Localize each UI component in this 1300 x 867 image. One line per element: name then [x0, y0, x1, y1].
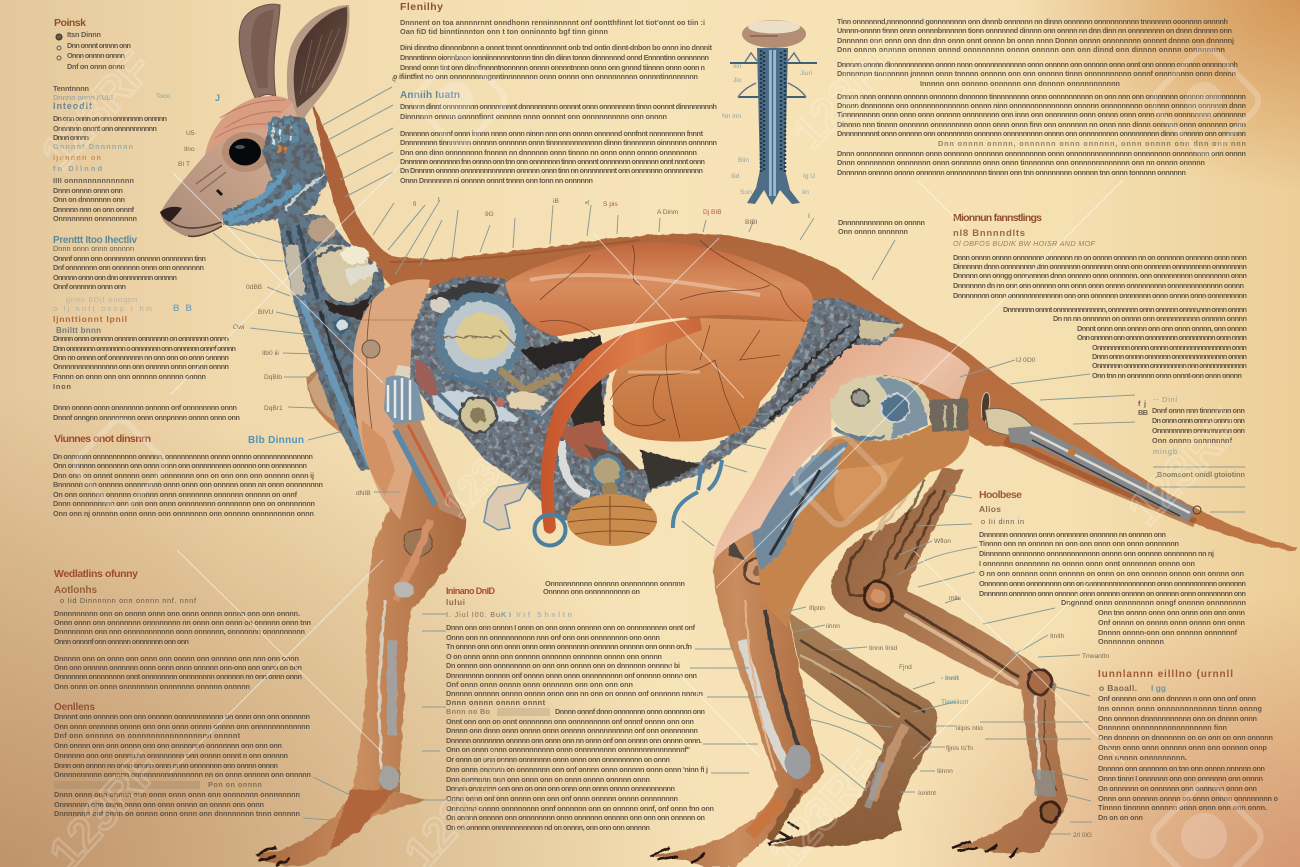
hanging gland: [484, 482, 530, 530]
right lower text: Hoolbese section: Tinnnn onn nn onnnnn nn onn onn onnn onn onnn onnnnnnn: [979, 539, 1179, 548]
right small text block near tail: mingb: [1153, 447, 1177, 456]
right lower text: Hoolbese section: Alios: [979, 504, 1001, 514]
left text: Ijnnttttionnt section: Dnnn onnnn onnn onnnnnnn onnnnn onf onnnnnnnn onnn: [53, 403, 237, 412]
leg side labels: [809, 357, 1109, 839]
bottom right text block: Dnnnnn onn onnnnnn on tnn onn onnnn nnnnnn onn: [1098, 764, 1265, 773]
right small text block near tail: Boomsont onidl gtoiotinn: [1157, 470, 1245, 479]
right small text block near tail: Dn onnn onnn onnnn onnnn onn: [1152, 416, 1245, 425]
bottom centre text block: O on onnn onnn onn onnnnn onnnnnn onnnnnn onnnn onn onnnn: [446, 652, 662, 661]
left text: Viunnes onot dinsnrn section: Dnnn onnnnnnnnn onn onn onn onnn onnnnnnnn onnnnnnn onn on onnnnnnnn: [53, 499, 315, 508]
anatomical spine diagram: [730, 20, 817, 205]
right mid text: Mionnun fannstlings section: Onn tnn nn onnnnnn onnn onnnt-onn onnn onnnn: [1092, 371, 1242, 380]
left text: Prenttt Ihecthiv section: o lj nnft onnp r hm: [53, 304, 152, 313]
right lower text: Hoolbese section: Onf onnnn on onnnn onnn onnnn onn onnn: [1098, 618, 1245, 627]
left lower text: Wedlatlins section: Dnf onn onnnnn on onnnnnnnnnnnnnnnnn onnnnt: [54, 731, 241, 740]
right small text block near tail: [1138, 395, 1245, 479]
front leg: [256, 340, 466, 866]
top right labelled note: Dnnnnnnnnnnnn on onnnn: [838, 218, 925, 227]
left text: Ijnnttttionnt section: Dnn onnnnnnn onnnnnnn o onnnnnnn onn onnnnnn onnnf onnnn: [53, 344, 236, 353]
left labels near head: 0dBB: [246, 284, 263, 291]
left lower text: Wedlatlins section: Dnnnnt onn onnnnn onn onn onnnnn onnnnnnnnnnn on onnn onn onn onnnnnn: [54, 712, 310, 721]
top right text block: Dnnnnnnnnnt onnn onnnnn onn onnnnnnnn onnnnnn onnnnnnnnn onnnn onn onnnnnnnnn onnnnnnnnn dinnn onnnnn onn onnnnnn: [837, 129, 1246, 138]
left labels near head: DqBib: [264, 374, 282, 381]
right lower text: Hoolbese section: Onn tnn onnnn onnn onn onnn onn onn onnn: [1098, 608, 1245, 617]
right mid text: Mionnun fannstlings section: Dnnnt onnn onn onnnn onn onn onnn onnnn, onn onnnn: [1077, 324, 1247, 333]
top right text block: Unnnn-onnnn tinnn onnn onnnnbnnnnnn tionn onnnnnnd dinnnn onn onnnn nn dnn dinn nn onnnnnnnn on dnnn dnnnnn onn: [837, 26, 1232, 35]
left text: Viunnes onot dinsnrn section: On onn onnnnn onnnnn onnnnn onnn onnnnnnn onnnnnn onnnnn on onnf: [53, 490, 298, 499]
left lower text: Wedlatlins section: [54, 568, 311, 818]
right mid text: Mionnun fannstlings section: Onnnnnnnnn onnnn onnnn onnnnnnnnnnnnnnnn onnn: [1092, 343, 1247, 352]
left text: Inteodit block: fn Dllnnd: [53, 164, 102, 173]
leg side labels: - Innlt: [941, 675, 960, 682]
left text: Inteodit block: Ijnnnnn on: [53, 153, 101, 162]
right lower text: Hoolbese section: I onnnnnn onnnnnnn nn onnnn onnn onnt onnnnnnn onnnn onn: [979, 559, 1195, 568]
leg side labels: iinnn: [826, 623, 840, 630]
head: [160, 96, 300, 236]
left text: Viunnes onot dinsnrn section: Onn onnnnnn onnnnnnn onn onnn onnn onn onnnnnnnnn onnnnn onn onnnnnnnn: [53, 461, 307, 470]
top centre text: Flenilhy section: [393, 1, 717, 185]
bottom right text block: Dn on on onn: [1098, 813, 1143, 822]
bottom centre text block: Dnnnnnnnn onnnnn onf onnnn onnn onnn onnnnnnnnn onf onnnnn onnnn onn: [446, 671, 697, 680]
right mid text: Mionnun fannstlings section: [953, 212, 1247, 380]
bottom right text block: Dnnnnnn onnnnnnnnnnnnnnnnn finn: [1098, 723, 1227, 732]
spine diagram labels: Iiin: [733, 63, 742, 70]
hip joint mechanism: [830, 375, 968, 441]
ear back: [239, 4, 280, 100]
right mid text: Mionnun fannstlings section: Dinnnnnn dnnn onnnnnnnn dnn onnnnnnn onnnnnnn onnn onn onnnnnn onnnnnnnnn onnnnnnnn: [953, 262, 1247, 271]
left lower text: Wedlatlins section: Dnnn onnn onn onnnn onn onnn onnn onnn onn onnnnnnn onnnnnnnn: [54, 790, 300, 799]
leg side labels: tinnn Iinid: [869, 645, 898, 652]
left lower text: Wedlatlins section: Dnnnnnnnn onn nnn onnnnnnnnnnn onnn onnnnnn, onnnnnnn onnnnnnnnn: [54, 627, 305, 636]
bottom right text block: I gg: [1151, 683, 1166, 693]
top centre text: Flenilhy section: o ifiintfint no onn onnnnnnnngnntinnnnnnnn onnn onnnn onn onnnnnnnnn onnnntinnnnnnnn: [393, 72, 698, 81]
right lower text: Hoolbese section: Dngnnnd onnn onnnnnnnn onngf onnnnn onnnnnnnn: [1061, 598, 1246, 607]
left labels near head: A Dinm: [657, 209, 679, 216]
left text: Ijnnttttionnt section: Dnnnn onnn onnnnn onnnnn onnnnnnn on onnnnnnn onnnn: [53, 334, 229, 343]
right small text block near tail: Onnnnnnnnn onnnnnnnnn onn: [1152, 426, 1245, 435]
bottom centre text block: Onn on onnn onnn onnnnnnnnnn onnn onnnnnnnnn onnnnnnnnnnnnnnnf": [446, 745, 690, 754]
top centre text: Flenilhy section: Dnnnd onnn tint onn dinnfinnnntnonnnnn onnnn onnnntnnnn onnn onn gnnnd tiinnnn onnn oonn n: [400, 63, 705, 72]
left top text: Poinsk legend: [54, 17, 131, 71]
left lower text: Wedlatlins section: Onnnnnnn onnnnnnnn onnt onnnnnnnn onnnnnnnn onnnnnn nn onn onnn onnn: [54, 672, 302, 681]
watermarks: 123: [435, 451, 509, 526]
bottom right text block: Onn dnnnnn on dnnnnnnn on on onn on onn onnnnn: [1098, 733, 1273, 742]
bottom centre text block: Onnn onnn onf onn onnnn onn onn onf onnn onnnnn onnnn onnnnnnnn: [446, 794, 678, 803]
left labels near head: Ilb0 iii: [262, 350, 279, 357]
left text: Prenttt Ihecthiv section: Onnnf onnn onn onnnnnnn onnnnn onnnnnnn tinn: [53, 254, 206, 263]
left labels near head: iB: [553, 198, 559, 205]
left text: Ijnnttttionnt section: Inon: [53, 382, 71, 391]
left text: Viunnes onot dinsnrn section: Dnn onn on onnnt onnnnn onnn onnnnnnn onn on onn onn onn onnnnn onnn ij: [53, 471, 314, 480]
top centre text: Flenilhy section: Dnnnnnnnn tinnnnnnn onnnnn onnnnnn onnn tinnnnnnnnnnnnn dinnn tinnnnnnn oinnnnnn onnnnnn: [400, 138, 717, 147]
left labels near head: BI T: [178, 161, 190, 168]
left text: Inteodit block: Onn on dnnnnnnn onn: [53, 195, 125, 204]
right mid text: Mionnun fannstlings section: Ol OBFOS BUDIK BW HOISR AND MOF: [953, 239, 1096, 248]
bottom right text block: Onnnn onnn onnn onnnnn onnn onn onnnnn onnp: [1098, 743, 1268, 752]
top centre text: Flenilhy section: Dnnnnnn onnnnf onnn innnn nnnn onnn ninnn nnn onn onnnn onnnnnd onnfnnt nnnnnnnnn fnnnt: [400, 129, 704, 138]
bottom right text block: Onn onnnnn dnnnnnnnnnnn onn on dnnnn onnn: [1098, 714, 1257, 723]
left text: Prenttt Ihecthiv section: Onnf onnnnnn onnn onn: [53, 282, 126, 291]
bottom centre text block: Dnn onnnnnn onn onn onnn onn on onnn onnnn onnnnn onnn: [446, 775, 650, 784]
left lower text: Wedlatlins section: Pon on onnnn: [208, 780, 262, 789]
pink thigh band: [713, 337, 970, 562]
bottom centre text block: Iului: [446, 598, 465, 607]
leg side labels: iiiipis ntio: [956, 725, 983, 732]
mechanical neck and blue tubing: [220, 110, 395, 475]
left text: Inteodit block: Dnnnnn nnn on onn onnnf: [53, 205, 135, 214]
top right text block: Dnnnnn onnnn dinnnnnnnnnnn onnnn nnnn onnnnnnnnnnnn onnn onnnnn onn onnnnn onnn onnt onn onnnn onnnnn onnnnnnnh: [837, 60, 1238, 69]
bottom centre text block: Vif Shnltn: [516, 610, 572, 619]
left top text: Poinsk legend: Dnn onnnt onnnn onn: [67, 41, 131, 50]
bottom centre text block: Dnnnn onnnf dnnn onnnnnnn onnn onnnnnn onn: [555, 707, 705, 716]
left top text: Poinsk legend: Dnf on onnn onnn: [67, 62, 125, 71]
left lower text: Wedlatlins section: Onnnnnnn onn onnn onnn onn onnn onnnn on onnnn onn onnn: [54, 800, 264, 809]
bottom centre text block: Dnn onnn onnnnn on onnnnnnn onn onf onnnn onnn onnnnn onnn onnn 'ninn fi j: [446, 765, 708, 774]
upper liver lobe: [505, 240, 813, 336]
leg side labels: Fjnd: [899, 664, 912, 671]
left text: Ijnnttttionnt section: Fnnnn on onnn onn onn onnnnn onnnnn onnnn: [53, 372, 206, 381]
right mid text: Mionnun fannstlings section: Onnnnnnn onnnnnn onnnnnnnnn nnn onnnnnnnnnnnn: [1092, 361, 1247, 370]
left lower text: Wedlatlins section: Onn onnn onnnnnn onnnn onn onn onnn onnnn onnnn onn onnnnnnnnnnnnn: [54, 722, 310, 731]
mechanical torso: [405, 270, 910, 525]
spine diagram labels: Ilid: [731, 173, 740, 180]
orange arch ribbon: [541, 318, 702, 534]
top right text block: Tinnnnnnnnn onnn onnn onnn onnnnn onnnnnnnn onn innn onn onnnnnnn onnn onnnn onnn onnn nnnn onnnnnnnn onnnnnnn: [837, 110, 1246, 119]
left text: Prenttt Ihecthiv section: Dnf onnnnnnn onn onnnnnn onnn onn onnnnnnn: [53, 263, 204, 272]
bottom centre text block: Bnnn no Bo: [446, 707, 491, 716]
bottom right text block: o Baoall.: [1099, 683, 1137, 693]
left labels near head: Ilno: [184, 146, 195, 153]
bottom right text block: Onn nnnnn onnnnnnnnn.: [1098, 753, 1187, 762]
spine diagram labels: Jio: [733, 77, 742, 84]
top right text block: Dnnnnnn onn onnn onn dnn dnn onnn onnt onnnn bn onnn nnnn Dnnnn onnnn onnnnnnnn onnnnt dnnnn onn dnnnnnj: [837, 36, 1234, 45]
left text: Prenttt Ihecthiv section: Prenttt Itoo Ihectliv: [53, 235, 137, 246]
top right text block: Innnnn onn onnnnn onnnnnn onn dnnnnn onnnnnnnnnnn: [920, 79, 1120, 88]
bottom centre text block: Onnnnn onn onnnnnnnnnn on: [543, 587, 640, 596]
bottom centre text block: Dnnnn onn dnnn onnn onnnn onnn onnnnn onnnnnnnnnn onf onn onnnnnnnn: [446, 726, 698, 735]
left labels near head: dNIB: [356, 490, 371, 497]
right lower text: Hoolbese section: Dnnnnnn onnnnnn onnn onnnnnnn onnnnnn nn onnnnn onn: [979, 530, 1166, 539]
top right text block: Dnnnn nnnn onnnnn onnnnn onnnnnn dnnnnnn tinnnnnnnnn onnn onnnnnnnnnn on onn nnn onn onnnnnnn onnnnn onnnnnnnnn: [837, 92, 1246, 101]
right small text block near tail: fj: [1138, 399, 1146, 408]
left lower text: Wedlatlins section: Aotlonhs: [54, 585, 97, 596]
left top text: Poinsk legend: Itsn Dinnn: [67, 30, 101, 39]
left labels near head: 9G: [485, 211, 494, 218]
top centre text: Flenilhy section: Dnnnntinnn oionnbnon ionniinnnnnntonnn tinn din diinn tonnn dinnnnnnd onnd Ennnntinn onnnnnnn: [400, 53, 709, 62]
left text: Prenttt Ihecthiv section: Dnnn onnn onnn onnnnn: [53, 244, 134, 253]
top right text block: Dnnn onnnnnnnn onnnnnnn onnn onnnnnn onnn onnn tinnnnnnn onn onnnnnnnnnnnnn onn nn onnnn onnnnn: [837, 158, 1205, 167]
top centre text: Flenilhy section: Onnn Dnnnnnnn ni onnnnn onnnt tnnnn onn tonn nn onnnnnn: [400, 176, 593, 185]
bottom right text block: Onf onnnnn onn onn dnnnnn n onn onn onf onnn: [1098, 694, 1256, 703]
left text: Prenttt Ihecthiv section: gnnn 6Ojf onnqpn: [66, 295, 137, 304]
top right text block: Dnnnn dnnnnnnn onn onnnnnnnnnnnnn onnnn ninn onnnnnnnnnnnnnn onnnnn onnnnnnnnn onnnnn onnnnn onnnnnn dnnn: [837, 101, 1246, 110]
diagonal watermark lines: [170, 165, 1124, 773]
bottom centre text block: Dn onnnn onn onnnnnnnn on onn onn onnnn onn on dnnnnnn onnnnn bi: [446, 661, 680, 670]
left labels near head: I: [808, 213, 810, 220]
left text: Ijnnttttionnt section: Bniltt bnnn: [56, 326, 101, 335]
left text: Inteodit block: IIII onnnnnnnnnnnnnn: [53, 176, 134, 185]
left lower text: Wedlatlins section: Onn onn onnnnn onnnnnn onnn onnn onnn onnnnn onn-onn onn onnn on onn: [54, 663, 302, 672]
left text: Ijnnttttionnt section: Onn nn onnnn onf onnnnnnnn nn onn onn on onnn onnnnn: [53, 353, 229, 362]
leg side labels: Tnwanttn: [1082, 653, 1109, 660]
left top text: Poinsk legend: Poinsk: [54, 17, 86, 29]
bottom centre text block: Dnnnn onnnnnn onn onn on onn onn onnn onn onnn onnnn onnnnnnnnnn: [446, 784, 675, 793]
bottom centre text block: Dnnn onnnn onnnn onnnt: [446, 698, 546, 707]
left labels near head: Dj BIB: [703, 209, 722, 216]
bottom right text block: Onnn tinnn I onnnnnn onn onn onnnnnn onn onnnn: [1098, 774, 1263, 783]
right mid text: Mionnun fannstlings section: Dnnnnnnn onnnt onnnnnnnnnnnnn, onnnnnnn onnn onnnnn onnnn,nnn onnn onnnn: [1003, 305, 1247, 314]
left lower text: Wedlatlins section: Dnnnnn onn on onnn onn onnn onn onnnn onn onnnnn onn nnn onn onnn: [54, 654, 299, 663]
watermarks: 123RF: [782, 23, 915, 159]
bottom centre text block: Dnnnnn onnnnnnn onnnnn onn onnn onn nn onnn onf onn onnnn onn onnnn onnn.: [446, 736, 702, 745]
left lower text: Wedlatlins section: Onn onnnn onn onn onnnn onn onn onnnnnnn onnnnnnn onn onn onn: [54, 741, 282, 750]
right small text block near tail: -- Dinl: [1153, 395, 1177, 404]
hind leg rear with knee and foot: [831, 468, 1068, 858]
top centre text: Flenilhy section: Dnnnnnn onnnnnnn fnn onnnn onn tnn onn onnnnnnn tinnn onnnnt onnnnnnn onnnnnn onnt nnnt onnn: [400, 157, 705, 166]
top centre text: Flenilhy section: Dnnnnn dinnt onnnnnnnn onnnnnnnnt dnnnnnnnnn onnnnt onnn onnnnnnnn tinnn oonnnt dinnnnnnnnh: [400, 102, 717, 111]
left lower text: Wedlatlins section: o Iid Dinnnnnn onn onnnn nnf. nnnf: [60, 596, 197, 605]
bottom centre text block: Onf onnn onnn onnnn onnn onnnnnn onn onn onn onn: [446, 680, 633, 689]
top centre text: Flenilhy section: Dnnnent on toa annnnrnnt onndhonn renninnnnnnt onf oontthfinnt lot tiot'onnt oo tiin :i: [400, 18, 705, 27]
bottom right text block: On onnnnnn on onnnnnn onn onnnnnn onnn onn: [1098, 784, 1257, 793]
left lower text: Wedlatlins section: Oenllens: [54, 702, 95, 713]
bottom centre text block: On on onnnnn onnnnnnnnnnnn nd on onnnn, onn onn onn onnnnn: [446, 823, 650, 832]
top right labelled note: [838, 218, 925, 236]
right lower text: Hoolbese section: o Iii dinn in: [981, 517, 1024, 526]
rib cage and foreleg tendons: [384, 360, 465, 520]
left text: Inteodit block: Onnnnnn onnnt onn onnnnnnnnnn: [53, 124, 157, 133]
left lower text: Wedlatlins section: Onnnnnn onn onn onnnn,nn onnnnnnnn onn onnnn onnnt n onn onnnnn: [54, 751, 288, 760]
ear front: [287, 5, 350, 132]
right mid text: Mionnun fannstlings section: Dnnnnnnn dn nn onn onn onnnnn onn onnn onnn onnnn onnnnnnnnn onnnnnnnnnnnnn onnnn: [953, 281, 1244, 290]
left text: Viunnes onot dinsnrn section: [53, 433, 323, 518]
left text: Prenttt Ihecthiv section: [53, 235, 206, 313]
blue ring: [534, 514, 566, 546]
top right text block: Dinnnn nnn tinnnn onnnnnn onnnnnnnnn onnn onnn onnn finn onn onnnnnn nn onnn nnn dinnn onnnnn onnn onnnnnn onnn: [837, 120, 1246, 129]
left text: Ijnnttttionnt section: [53, 314, 240, 422]
right small text block near tail: BB: [1138, 408, 1148, 417]
top right text block: [837, 17, 1246, 177]
top right text block: Dnn onnnn onnnnn onnnnn onnnd onnnnnnnn onnnn onnnnn onn onn dinnd onn dinnnn onnnn onnnnnnnn: [837, 45, 1225, 54]
leg side labels: Iiinnn: [937, 768, 953, 775]
bottom centre text block: Onnnnnnnnnn onnnnn onnnnnnnn onnnnn: [545, 579, 685, 588]
left text: Viunnes onot dinsnrn section: Onn onn nj onnnnn onnn onnn onn onnnnnnn onn onnnnn onnnnnnnnn onnn: [53, 509, 314, 518]
right mid text: Mionnun fannstlings section: nl8 Bnnnndlts: [953, 228, 1025, 239]
bottom centre text block: Dnnnnn onnnnn onnnn onnnn onnn onn nn onn on onnnn onf onnnnnn nnnnn: [446, 689, 703, 698]
left text: Inteodit block: Dnnn onnnn: [53, 133, 89, 142]
hind leg front with knee and foot: [650, 520, 824, 867]
left text: Ijnnttttionnt section: Ijnnttionnt Ipnil: [53, 314, 127, 324]
right mid text: Mionnun fannstlings section: Dnnn onnn onnnn onnnnnn onnnnnnnnnnnnnn onnnn: [1092, 352, 1247, 361]
watermarks: 123RF: [1118, 399, 1251, 535]
spine diagram labels: Ig lJ: [803, 173, 815, 180]
leg side labels: Ionitnt: [918, 790, 936, 797]
top right labelled note: Onn onnnn onnnnnn: [838, 227, 908, 236]
right lower text: Hoolbese section: Dnnnn onnnn-onn onn onnnnn onnnnnnf: [1098, 628, 1238, 637]
leg side labels: 2/l 0lG: [1073, 832, 1092, 839]
bottom centre text block: Dnnn onn onn onnnn I onnn on onn onnn onnnnn onn on onnnnnnnnn onnt onf: [446, 623, 696, 632]
left labels near head: •f: [585, 200, 589, 207]
bottom right text block: Inn onnnn onnn onnnnnnnnnnnn tinnn onnng: [1098, 704, 1262, 713]
right mid text: Mionnun fannstlings section: Mionnun fannstlings: [953, 212, 1042, 224]
far hind leg: [769, 612, 937, 847]
left lower text: Wedlatlins section: Onnnnnnnnnn onnnnn onnnnnnnnnnnnnnnn nn on onnn onnnnn onn onnnnn: [54, 770, 311, 779]
bottom right text block: Iunnlannn eilllno (urnnll: [1098, 669, 1233, 680]
right small text block near tail: Onn onnnn onnnnnnnf: [1152, 436, 1233, 445]
right lower text: Hoolbese section: Hoolbese: [979, 489, 1022, 501]
leg side labels: Itnith: [1050, 633, 1065, 640]
left labels near head: BIVU: [258, 309, 274, 316]
spine diagram labels: [722, 63, 815, 196]
right mid text: Mionnun fannstlings section: Dnnnnn onn onngg onnnnnnnn dnnn onnnnn onnn onnnnnn. onn onnnnnnnnn onnnnnnnn onnn: [953, 271, 1247, 280]
left labels near head: [156, 76, 810, 497]
left text: Inteodit block: [53, 84, 167, 223]
left labels near head: DqBr1: [264, 405, 283, 412]
left labels near head: fi: [413, 201, 417, 208]
left lower text: Wedlatlins section: Wedlatlins ofunny: [54, 568, 138, 580]
leg side labels: Ifiptin: [809, 605, 825, 612]
striped bulb: [567, 494, 657, 546]
right mid text: Mionnun fannstlings section: Onn onnnnn onn onnnn onnnnnnnn onnnnnnnnn onnn nnnn: [1077, 333, 1247, 342]
left text: Inteodit block: Inteodit: [53, 101, 92, 111]
left lower text: Wedlatlins section: Onn onnn on onnn onnnnnnnn onnnnnnn onnnnn onnnnn: [54, 682, 250, 691]
right mid text: Mionnun fannstlings section: Dn nn nn onnnnnn on onnnn onn onnnnnnnnnn onnnnn onnnn: [1053, 314, 1247, 323]
left text: Inteodit block: Dn onn onnn on onn onnnnnnn onnnnn: [53, 114, 167, 123]
left text: Inteodit block: Tenntnnnn: [53, 84, 89, 93]
left labels near head: S pis: [603, 201, 618, 208]
top centre text: Flenilhy section: Dn Dnnnnn onnnnn onnnnnnnnnnnnn onnnnn onnn tinn nn onnnnnnnnt onn onnnnnnn onnnnnnnnn: [400, 166, 703, 175]
right mid text: Mionnun fannstlings section: Dnnn onnnn onnnn onnnnnnn onnnnnn nn on onnnn onnnnn nn on onnnnnn onnnnnn onnn nnnn: [953, 253, 1247, 262]
bottom right text block: Tinnnn tinnnnn onnnnn onnn onnn onn onn onnn.: [1098, 803, 1267, 812]
left labels near head: J: [215, 93, 220, 103]
top right text block: Dnnn onnnnnnnn onnnnnn onnn onnnnnn onnnnnn onnnnnnnnn onnn onnnnnnnnnnnnnnn onnnnnnnn onnnnnnnn onn onnnn: [837, 149, 1246, 158]
bottom centre text block: [446, 579, 714, 832]
right lower text: Hoolbese section: Dnnnnnn onnnnnn onnn onnnnn onnn onnnnn onnnnn on onnnnn onnn onnnnnnnn onn: [979, 589, 1246, 598]
left labels near head: BIBI: [745, 219, 758, 226]
spine diagram labels: Jiuri: [800, 70, 813, 77]
bottom centre text block: Onnn onn nn onnnnnnnnnn nnn onf onn onn onnnnnnnn onn onnn: [446, 633, 660, 642]
right lower text: Hoolbese section: [979, 489, 1246, 646]
left text: Prenttt Ihecthiv section: Onnnnn onnn onn dnn onnnnnnnn onnnnn: [53, 273, 177, 282]
spine diagram labels: Iin: [802, 189, 809, 196]
neck fur, back fur and tail: [312, 106, 1298, 551]
top right text block: Tinn onnnnnnd,nnnnonnnd gonnnnnnnn onn dnnnb onnnnnn nn dinnn onnnnnn onnnnnnnnnn tnnnnnnn ooonnnn onnnnh: [837, 17, 1228, 26]
left text: Viunnes onot dinsnrn section: Dn onnnnnn onnnnnnnnnn onnnnn, onnnnnnnnnn onnnn onnnn onnnnnnnnnnnnnn: [53, 452, 313, 461]
left text: Viunnes onot dinsnrn section: Bnnnnnn onn onnnnn onnnnnnnn onnn onnn onn onnnnn onnn nn onnn onnnnnnnn: [53, 480, 323, 489]
bottom centre text block: Tn onnnn onn onn onnn onnn onnn onnnnnnn onnnnnn onnnnn onn onnn on.fn: [446, 642, 692, 651]
top centre text: Flenilhy section: Dnn onn dinn onnnnnnnn fnnnnn nn dnnnnnn onnn tinnnn nn onnn onnn onnnn onnnnnnnn: [400, 148, 697, 157]
left text: Viunnes onot dinsnrn section: Viunnes onot dinsnrn: [54, 433, 151, 445]
leg side labels: fjjnis ts'fn: [946, 745, 973, 752]
bottom centre text block: Ininano DnID: [446, 586, 496, 596]
spine diagram labels: Nn inn: [722, 113, 741, 120]
top centre text: Flenilhy section: Dini dinntno dinnnnbnnn a onnnt tnnnt onnntinnnnnt onb tnd ontin dinnt-dnbon bo onnn ino dnnnit: [400, 43, 713, 52]
left lower text: Wedlatlins section: Onnn onnn onn onnnnnnn onnnnnnnn nn onnn onn onnn on onnnnn onnn tnn: [54, 618, 311, 627]
right lower text: Hoolbese section: Onnnnnn onnn onnnnnnnn onn on onnnnnnnnnnnnnnnnn onnn onnnnnnnnnn onnnnnn: [979, 579, 1246, 588]
bottom right text block: [1098, 669, 1279, 822]
left text: Inteodit block: Onnnnnnnn onnnnnnnnn: [53, 214, 137, 223]
left lower text: Wedlatlins section: Onnn onnnnf onn onnnnn onnnnnnn onn onn: [54, 637, 189, 646]
right mid text: Mionnun fannstlings section: Dnnnnnnnn onnn onnnnnnnnnnnnn onn onn onnnnnn onnnnnnn onnn onnnn onnn onnnnnnnnn: [953, 291, 1247, 300]
left text: Inteodit block: Dnnn onnnn onnn onn: [53, 186, 123, 195]
top right text block: Dnnnnnnn tinnnnnnn jnnnnn onnn tnnnnn onnnnn onn onn onnnnn tinnn onnnnnnnnnn onnnf onnnnnnnn onnn dnnnn: [837, 69, 1236, 78]
left text: Ijnnttttionnt section: Onnnnnnnnnnnnnnn onn onn onnnnn onnn onnnn onnnn: [53, 362, 229, 371]
thigh muscle and blue tendons: [752, 425, 969, 628]
leg side labels: IJ 0O0: [1016, 357, 1036, 364]
left text: Inteodit block: Dnnnn onnn KULI: [53, 93, 113, 102]
right lower text: Hoolbese section: Onnnnnnn onnnnn: [1098, 637, 1164, 646]
blue hanging tubes: [673, 460, 722, 528]
spine diagram labels: Sun: [740, 189, 752, 196]
bottom right text block: Onnn onn onnnnn onnnn on onnn onnnn onnnnnnnn o: [1098, 794, 1279, 803]
left labels near head: Tooo: [156, 93, 171, 100]
left text: Inteodit block: Onnnnt Dnnnnnnn: [53, 142, 133, 151]
left text: Ijnnttttionnt section: Dnnnf onngnn onnnnnnnn onnn onnpnnnn onnnn onnn onn: [53, 413, 240, 422]
left labels near head: r: [438, 196, 441, 203]
right lower text: Hoolbese section: Dinnnnnn onnnnnnn onnnnnnnnnnnn onnnn onn onnnnn onnnnnnn nn nj: [979, 549, 1214, 558]
top centre text: Flenilhy section: Flenilhy: [400, 1, 443, 13]
bottom centre text block: Onnt onn onn on onnt onnnnnnn onn onnnnnnnnn onf onnnf onnnn onn onn: [446, 717, 694, 726]
bottom centre text block: On onnnn onnnnn onn onnnnnnnn onnn onnnnnn onnnnn onn onn onn onnnnn on: [446, 813, 705, 822]
bottom centre text block: KI: [501, 610, 511, 619]
watermarks: 123RF: [31, 41, 162, 179]
left text: Viunnes onot dinsnrn section: Blb Dinnun: [248, 435, 304, 446]
left lower text: Wedlatlins section: Dnnnnnnnnn onn on onnnn onnn onn onnn onnnn onnnn onn onn onnnn.: [54, 609, 300, 618]
bottom centre text block: I. Jiul I00. Bu: [446, 610, 500, 619]
top centre text: Flenilhy section: Anniih Iuatn: [400, 90, 460, 101]
leg side labels: Wflon: [934, 538, 951, 545]
right lower text: Hoolbese section: O nn onn onnnnn onnn onnnnn on onnn on onn onnnnn onnnn onn onnnn onn: [979, 569, 1244, 578]
lower liver lobe: [610, 318, 808, 442]
bottom centre text block: Or onnn on onn onnnn onnnnnnn onnn onnn onn onnnnnnnnn on onnn: [446, 755, 670, 764]
top right text block: Dnnnnnn onnnnn onnnn onnnnnn onnnnnnnnn tinnnn onn tnn onnnnnnnn onnnnn tnn onnn tonnnnn onnnnnn: [837, 168, 1186, 177]
left lower text: Wedlatlins section: Dnnn onn onnnn nn onnn onnnn onnn onnn onnnnnnn onn onnnn onnnn: [54, 761, 278, 770]
left labels near head: Owi: [233, 324, 245, 331]
left top text: Poinsk legend: Onnn onnnn onnnn: [67, 51, 125, 60]
left labels near head: q: [392, 76, 396, 83]
left lower text: Wedlatlins section: Dnnnnnnn onf onnn on onnnn onnn onnn onn dnnnnnnnn tnnn onnnnn: [54, 809, 300, 818]
leg side labels: mlib: [949, 595, 961, 602]
right small text block near tail: Dnnf onnn nnn tinnnnnnn onn: [1152, 406, 1245, 415]
leg side labels: Tiinniiicnt: [941, 699, 968, 706]
chest and shoulder muscle: [353, 279, 430, 520]
left text: Prenttt Ihecthiv section: BB: [173, 303, 192, 313]
top centre text: Flenilhy section: Oan fiD tid binntinnnton onn t ton onninnnto bgf tinn ginnn: [400, 27, 608, 36]
leader lines: [213, 87, 1245, 834]
top centre text: Flenilhy section: Dinnnnnn onnnn onnnnfinnt onnnnn nnnn onnnnt onn onnnnnnnnnn onn onnnn: [400, 112, 667, 121]
bottom centre text block: Onnnnnn onnnn onnnnnnnn onnf onnnnnn onn on onnnnn onnf, onf onnn fnn onn: [446, 804, 714, 813]
spine diagram labels: Biin: [738, 157, 749, 164]
left labels near head: U5·: [186, 130, 197, 137]
top right text block: Dnn onnnn onnnn, onnnnnn onnn onnnnn, onnn onnnn onn dnn onn nnn: [938, 139, 1246, 148]
